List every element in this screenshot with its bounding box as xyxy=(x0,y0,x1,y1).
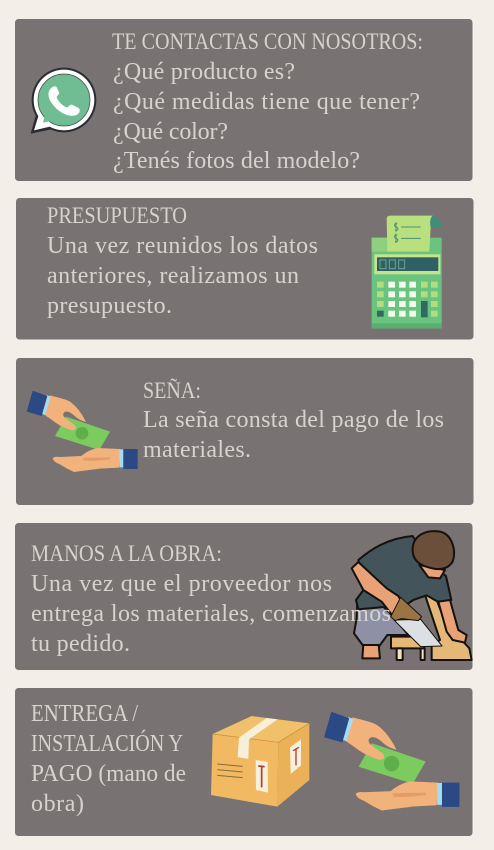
icon: WhatsApp xyxy=(31,68,96,133)
panel: work xyxy=(15,523,472,670)
text block: budget xyxy=(47,233,318,319)
text block: contact questions: ¿Qué color? xyxy=(113,119,228,145)
text block: deposit: materiales. xyxy=(143,437,251,463)
text block: contact questions: ¿Qué producto es? xyxy=(113,59,295,85)
text block: deposit xyxy=(143,407,444,463)
icon: cardboard box xyxy=(211,716,309,807)
icon: hands exchanging money xyxy=(324,712,459,811)
panel: delivery xyxy=(15,688,472,836)
text block: contact questions: ¿Tenés fotos del modelo? xyxy=(113,148,360,174)
text block: budget: presupuesto. xyxy=(47,293,172,319)
text block: contact questions: ¿Qué medidas tiene que tener? xyxy=(113,89,420,115)
text block: work: Una vez que el proveedor nos xyxy=(31,571,332,597)
icon: calculator xyxy=(372,215,442,328)
heading: work: MANOS A LA OBRA: xyxy=(31,541,222,567)
heading: contact: TE CONTACTAS CON NOSOTROS: xyxy=(112,29,423,55)
text block: deposit: La seña consta del pago de los xyxy=(143,407,444,433)
panel: contact xyxy=(15,19,472,181)
text block: work: tu pedido. xyxy=(31,631,130,657)
heading: deposit: SEÑA: xyxy=(143,378,201,404)
heading: delivery: INSTALACIÓN Y xyxy=(31,730,183,757)
icon: hands exchanging money xyxy=(27,391,138,472)
icon: carpenter sawing xyxy=(352,531,472,660)
text block: work: entrega los materiales, comenzamos xyxy=(31,601,391,627)
heading: delivery: ENTREGA / xyxy=(31,701,138,727)
text block: budget: anteriores, realizamos un xyxy=(47,263,299,289)
text block: budget: Una vez reunidos los datos xyxy=(47,233,318,259)
heading: budget: PRESUPUESTO xyxy=(47,203,187,229)
heading: delivery: PAGO (mano de xyxy=(31,761,186,787)
heading: delivery xyxy=(31,701,186,817)
text block: contact questions xyxy=(113,59,420,174)
heading: delivery: obra) xyxy=(31,791,84,817)
panel: deposit xyxy=(16,358,474,505)
text block: work xyxy=(31,571,391,657)
panel: budget xyxy=(16,198,474,340)
